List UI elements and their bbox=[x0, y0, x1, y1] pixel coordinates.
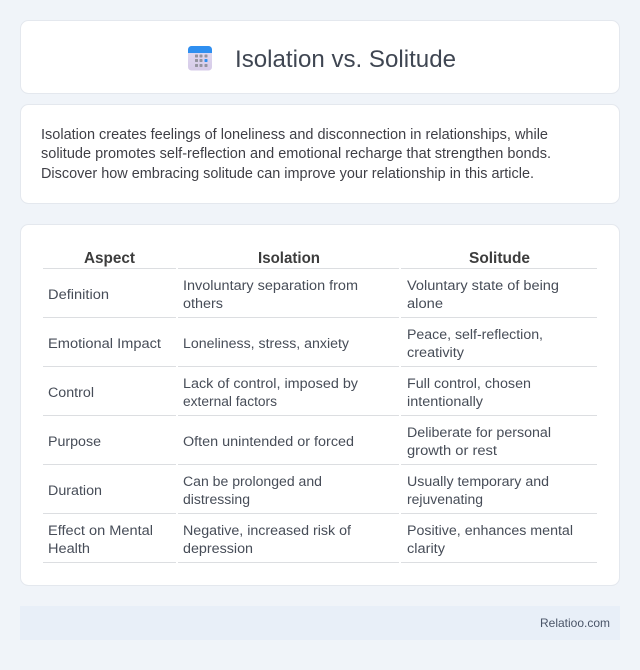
row: duration: Duration bbox=[48, 483, 102, 499]
intro text: Discover how embracing solitude can improve your relationship in this article. bbox=[41, 166, 534, 182]
row: definition: Involuntary separation from bbox=[183, 278, 358, 294]
row: control: Full control, chosen bbox=[407, 376, 531, 392]
row: definition: alone bbox=[407, 296, 443, 312]
table header row: Aspect bbox=[84, 250, 136, 267]
row: effect on mental health: clarity bbox=[407, 541, 446, 557]
intro panel bbox=[20, 104, 620, 204]
table rules bbox=[43, 268, 597, 563]
row: purpose bbox=[48, 425, 551, 459]
icon: calendar bbox=[188, 46, 212, 70]
row: duration: Can be prolonged and bbox=[183, 474, 322, 490]
row: effect on mental health: depression bbox=[183, 541, 253, 557]
row: emotional impact: Loneliness, stress, anxiety bbox=[183, 336, 350, 352]
row: control: Lack of control, imposed by bbox=[183, 376, 359, 392]
row: definition: others bbox=[183, 296, 223, 312]
row: emotional impact: Peace, self-reflection, bbox=[407, 327, 543, 343]
row: emotional impact: creativity bbox=[407, 345, 465, 361]
row: effect on mental health: Negative, increased risk of bbox=[183, 523, 351, 539]
title: Isolation vs. Solitude bbox=[235, 46, 456, 73]
table header row: Solitude bbox=[469, 250, 530, 267]
row: emotional impact: Emotional Impact bbox=[48, 336, 161, 352]
intro text: solitude promotes self-reflection and emotional recharge that strengthen bonds. bbox=[41, 146, 551, 162]
footer credit: Relatioo.com bbox=[540, 616, 610, 630]
row: duration: distressing bbox=[183, 492, 250, 508]
row: control: external factors bbox=[183, 394, 277, 410]
row: control bbox=[48, 376, 531, 410]
row: duration: Usually temporary and bbox=[407, 474, 549, 490]
footer bar bbox=[20, 606, 620, 640]
row: definition: Definition bbox=[48, 287, 109, 303]
table panel bbox=[20, 224, 620, 586]
table header row bbox=[84, 250, 530, 267]
table header row: Isolation bbox=[258, 250, 320, 267]
row: control: Control bbox=[48, 385, 94, 401]
row: effect on mental health: Health bbox=[48, 541, 90, 557]
header panel bbox=[20, 20, 620, 94]
row: effect on mental health bbox=[48, 523, 573, 557]
row: purpose: Often unintended or forced bbox=[183, 434, 354, 450]
row: purpose: Deliberate for personal bbox=[407, 425, 551, 441]
intro text: Isolation creates feelings of loneliness and disconnection in relationships, while bbox=[41, 127, 548, 143]
row: duration: rejuvenating bbox=[407, 492, 483, 508]
row: duration bbox=[48, 474, 549, 508]
row: control: intentionally bbox=[407, 394, 484, 410]
row: purpose: Purpose bbox=[48, 434, 101, 450]
intro text bbox=[41, 127, 551, 182]
row: emotional impact bbox=[48, 327, 543, 361]
row: definition: Voluntary state of being bbox=[407, 278, 559, 294]
row: definition bbox=[48, 278, 559, 312]
row: effect on mental health: Effect on Mental bbox=[48, 523, 153, 539]
row: purpose: growth or rest bbox=[407, 443, 497, 459]
row: effect on mental health: Positive, enhances mental bbox=[407, 523, 573, 539]
